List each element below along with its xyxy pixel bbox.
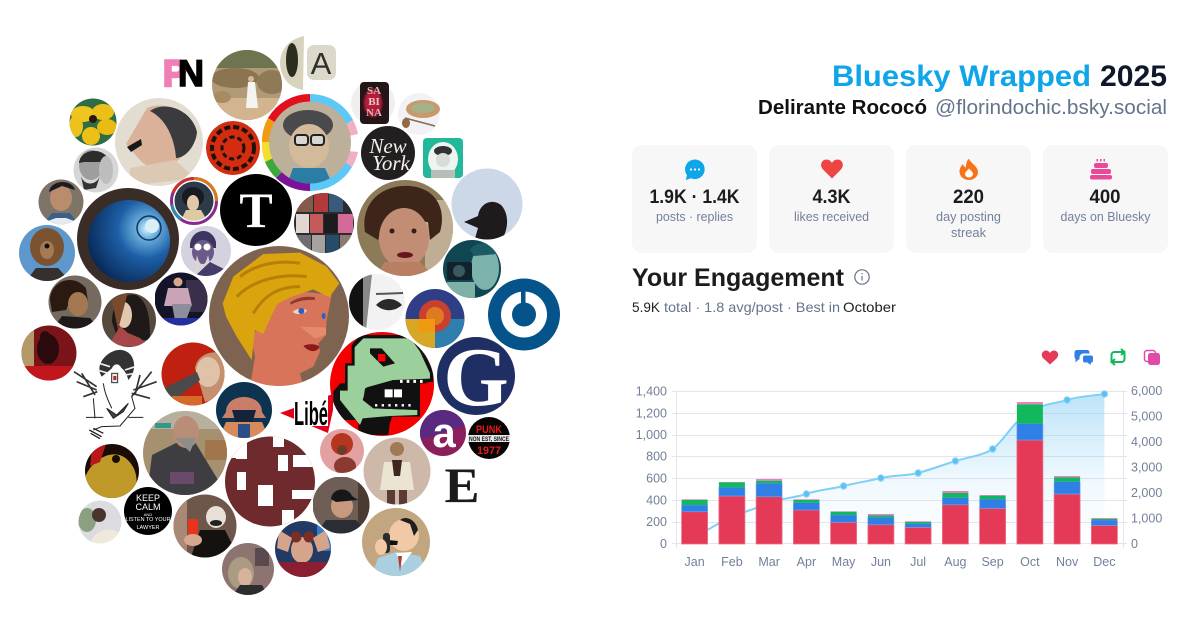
panel: day posting streak: 220 xyxy=(953,187,984,208)
bars: reposts xyxy=(682,404,1117,524)
user name and handle: Delirante Rococó xyxy=(758,97,927,119)
avatar: Punk 1977 badge: 1977 xyxy=(477,445,501,457)
avatar: red monkey painting xyxy=(21,325,77,381)
avatar: teal camera portrait xyxy=(443,240,501,298)
month labels: Oct xyxy=(1020,555,1040,569)
icon: reposts arrows xyxy=(1112,349,1124,365)
month labels: Jul xyxy=(910,555,926,569)
avatar: Libé logo xyxy=(280,394,333,433)
stat cards xyxy=(632,145,1168,253)
avatar: Punk 1977 badge: NON EST, SINCE xyxy=(469,437,509,443)
month labels xyxy=(685,555,1116,569)
avatar: red hat figure xyxy=(320,429,364,475)
month labels: Jan xyxy=(685,555,705,569)
avatar: New York Times T xyxy=(220,174,292,246)
avatar: Guardian G: G xyxy=(443,331,509,424)
avatar: Rembrandt portrait xyxy=(48,275,102,330)
avatar: yellow flower xyxy=(69,98,117,146)
avatar: New York magazine: New xyxy=(368,134,407,158)
left axis labels: 400 xyxy=(646,494,667,508)
left axis labels: 1,000 xyxy=(636,428,667,442)
engagement summary xyxy=(632,299,896,315)
avatar: Darth Vader in pattern xyxy=(216,382,272,440)
avatar: maroon pixel shape xyxy=(225,436,315,527)
icon: quotes copy xyxy=(1144,350,1160,365)
bars: quotes xyxy=(682,402,1117,522)
avatar: Sabina book xyxy=(351,81,395,125)
panel: posts and replies xyxy=(632,145,757,253)
cumulative line xyxy=(695,394,1104,537)
engagement summary: 5.9K xyxy=(632,299,661,315)
avatar: green square sketch xyxy=(423,138,463,178)
icon: heart xyxy=(821,160,843,178)
avatar: New York Times T: T xyxy=(239,182,273,238)
avatar: greyscale man covering eye xyxy=(73,147,119,193)
month labels: Dec xyxy=(1093,555,1116,569)
right axis labels: 1,000 xyxy=(1131,512,1162,526)
panel: days on Bluesky: 400 xyxy=(1090,187,1120,208)
avatar: Libé logo: Libé xyxy=(294,395,328,432)
month labels: Feb xyxy=(721,555,743,569)
right axis labels: 5,000 xyxy=(1131,410,1162,424)
panel: day posting streak: streak xyxy=(951,225,986,240)
avatar: Keep Calm poster: KEEP xyxy=(136,493,160,504)
grid and axes xyxy=(672,391,1127,548)
avatar: Economist-style E: E xyxy=(444,457,480,513)
avatar: PN logo xyxy=(163,53,204,94)
avatar: Tintin character on phone xyxy=(362,508,430,580)
panel: posts and replies: 1.9K · 1.4K xyxy=(650,187,740,208)
panel: likes received: 4.3K xyxy=(812,187,851,208)
title: Bluesky Wrapped xyxy=(832,60,1091,93)
avatar: bald man at cafe xyxy=(143,411,227,495)
avatar: purple a logo: a xyxy=(432,409,456,456)
panel: days on Bluesky xyxy=(1043,145,1168,253)
avatar: smiling man in cap xyxy=(38,179,84,226)
month labels: Aug xyxy=(944,555,967,569)
avatar: PN logo: N xyxy=(178,53,204,94)
avatar: Punk 1977 badge: PUNK xyxy=(476,424,502,436)
avatar: footballer with binocular hands xyxy=(275,521,331,578)
avatar: PA cut-out letters xyxy=(280,36,336,90)
icon: replies chat xyxy=(1074,350,1093,365)
avatar: renaissance lady xyxy=(102,292,156,347)
avatar: PA cut-out letters: A xyxy=(311,46,332,81)
avatar: Sabina book: NA xyxy=(366,107,382,119)
left axis labels: 1,200 xyxy=(636,406,667,420)
month labels: Mar xyxy=(758,555,780,569)
avatar: sunglasses beard figure xyxy=(181,226,231,280)
avatar: Sabina book: BI xyxy=(368,96,380,108)
line markers xyxy=(803,391,1108,497)
right axis labels: 3,000 xyxy=(1131,460,1162,474)
engagement summary: October xyxy=(843,299,896,315)
avatar: rainbow ring lady xyxy=(172,178,216,224)
right axis labels xyxy=(1131,384,1162,551)
right axis labels: 0 xyxy=(1131,537,1138,551)
avatar: red background girl with gun xyxy=(161,342,226,406)
avatar: woman with flowers xyxy=(78,500,124,544)
avatar: stormtrooper selfie xyxy=(174,494,236,558)
bars: likes xyxy=(682,440,1117,544)
avatar: rainbow ring portrait xyxy=(262,94,358,191)
panel: likes received: likes received xyxy=(794,209,869,224)
avatar: Punk 1977 badge xyxy=(468,417,510,459)
avatar: magazine covers collage xyxy=(294,193,354,253)
title: 2025 xyxy=(1100,60,1167,93)
avatar: seated man on stage xyxy=(155,272,209,328)
left axis labels: 0 xyxy=(660,537,667,551)
panel: day posting streak xyxy=(906,145,1031,253)
avatar: rocky landscape xyxy=(211,50,287,120)
avatar: speckled fish xyxy=(398,93,440,135)
right axis labels: 2,000 xyxy=(1131,486,1162,500)
avatar: red transcend lettering badge xyxy=(206,121,260,175)
panel: likes received xyxy=(769,145,894,253)
month labels: Nov xyxy=(1056,555,1079,569)
avatar: Keep Calm poster: LISTEN TO YOUR xyxy=(126,517,171,523)
avatar: New York magazine xyxy=(361,126,415,180)
right axis labels: 6,000 xyxy=(1131,384,1162,398)
left axis labels: 600 xyxy=(646,472,667,486)
avatar: pixel dinosaur xyxy=(330,332,437,440)
avatar: Keep Calm poster xyxy=(124,487,172,535)
avatar: op-art spiral xyxy=(405,289,465,349)
month labels: May xyxy=(832,555,856,569)
panel: days on Bluesky: days on Bluesky xyxy=(1060,209,1151,224)
avatar: blue ring logo xyxy=(488,278,560,350)
avatar: moustached portrait sketch xyxy=(115,98,203,186)
avatar: New York magazine: York xyxy=(372,151,411,175)
chart legend icons xyxy=(1042,349,1160,365)
avatar: Keep Calm poster: AND xyxy=(144,512,152,517)
icon: likes heart xyxy=(1042,350,1058,364)
icon: speech bubble xyxy=(685,159,705,180)
avatar: wind-blown hair against sky xyxy=(451,168,523,242)
month labels: Jun xyxy=(871,555,891,569)
avatar: black and white eye xyxy=(349,274,405,330)
avatar: man in black cap xyxy=(313,477,370,534)
left axis labels xyxy=(636,384,667,551)
avatar: PN logo: P xyxy=(163,53,187,94)
avatar: ink drawing of woman xyxy=(74,350,157,439)
right axis labels: 4,000 xyxy=(1131,435,1162,449)
avatar: grey-haired woman xyxy=(222,543,274,596)
avatar: golden dog xyxy=(85,444,139,500)
avatar bubble cluster xyxy=(19,36,560,596)
user name and handle: @florindochic.bsky.social xyxy=(935,97,1167,119)
avatar: purple a logo xyxy=(420,409,466,456)
cumulative area xyxy=(695,394,1104,544)
engagement summary: total · 1.8 avg/post · Best in xyxy=(664,299,840,315)
bars: replies xyxy=(682,424,1117,527)
avatar: Keep Calm poster: LAWYER xyxy=(136,525,160,531)
left axis labels: 800 xyxy=(646,450,667,464)
avatar: yellow-haired sculpture xyxy=(209,246,349,387)
avatar: curly-haired woman xyxy=(357,180,453,280)
icon: birthday cake xyxy=(1090,159,1112,180)
avatar: Sabina book: SA xyxy=(367,85,381,97)
avatar: blue eye tunnel xyxy=(77,188,179,290)
panel: posts and replies: posts · replies xyxy=(656,209,733,224)
month labels: Sep xyxy=(981,555,1004,569)
avatar: Keep Calm poster: CALM xyxy=(136,502,161,513)
left axis labels: 200 xyxy=(646,515,667,529)
user name and handle xyxy=(758,97,1167,119)
icon: flame xyxy=(960,158,978,180)
panel: day posting streak: day posting xyxy=(936,209,1001,224)
chart: monthly engagement stacked bars and cumulative line xyxy=(636,384,1162,569)
icon: info xyxy=(855,270,869,284)
avatar: dog-headed man xyxy=(19,225,75,281)
left axis labels: 1,400 xyxy=(636,384,667,398)
heading: Your Engagement: Your Engagement xyxy=(632,264,845,292)
avatar: vintage boy in cardigan xyxy=(363,437,431,505)
month labels: Apr xyxy=(797,555,816,569)
